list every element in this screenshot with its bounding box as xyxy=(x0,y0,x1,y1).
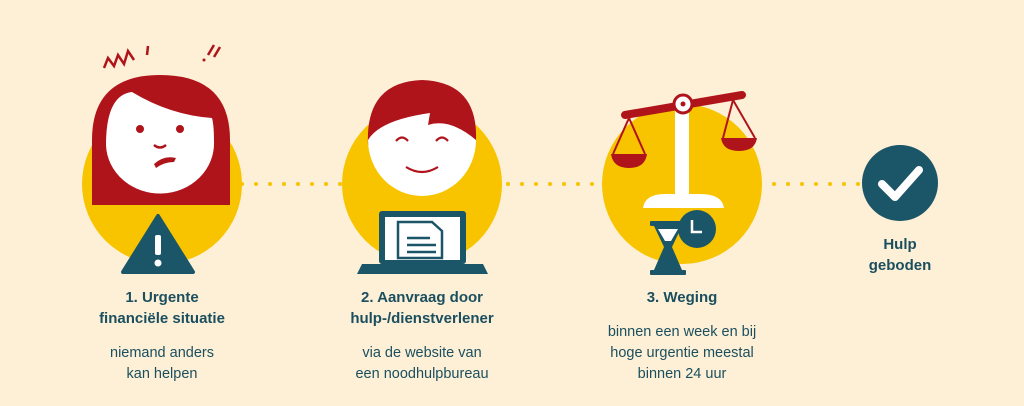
text: step 3 xyxy=(608,289,756,382)
text: step 3: 3. Weging xyxy=(647,289,717,306)
step 3 icon: scales and hourglass xyxy=(602,95,762,275)
warning triangle xyxy=(123,216,193,272)
text: step 2: via de website van xyxy=(362,345,482,361)
text: step 2: 2. Aanvraag door xyxy=(361,289,483,306)
text: step 1: financiële situatie xyxy=(99,310,225,327)
text: step 1: 1. Urgente xyxy=(125,289,199,306)
text: result: geboden xyxy=(869,257,931,274)
step 2 icon: person with laptop xyxy=(342,80,502,274)
text: step 2: hulp-/dienstverlener xyxy=(350,310,494,327)
text: step 2: een noodhulpbureau xyxy=(355,366,489,382)
dotted connector xyxy=(242,182,860,186)
icon: check xyxy=(862,145,938,221)
text: step 3: hoge urgentie meestal xyxy=(610,345,754,361)
text: step 1 xyxy=(99,289,225,382)
text: step 1: niemand anders xyxy=(110,345,214,361)
text: result: Hulp xyxy=(883,236,917,253)
text: step 3: binnen een week en bij xyxy=(608,324,756,340)
text: step 3: binnen 24 uur xyxy=(638,366,726,382)
step 1 icon: stressed person xyxy=(82,45,242,272)
text: step 1: kan helpen xyxy=(127,366,197,382)
text: step 2 xyxy=(350,289,494,382)
text: result xyxy=(869,236,931,274)
